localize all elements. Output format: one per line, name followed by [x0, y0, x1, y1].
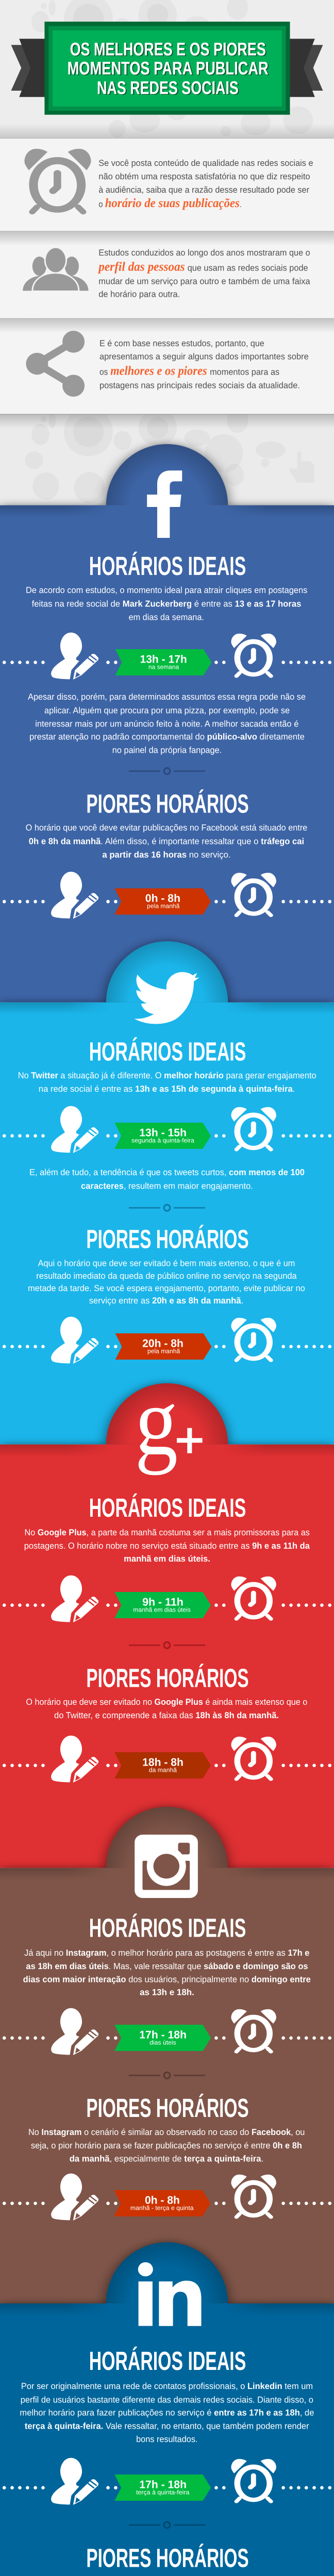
text: twitter ideal: na rede social é entre as 13h e as 15h de segunda à quinta-feira. — [39, 1084, 295, 1094]
text: instagram ideal: as 13h e 18h. — [140, 1988, 194, 1997]
heading: piores horários: PIORES HORÁRIOS — [86, 1225, 249, 1254]
badge: 0h - 8h: manhã - terça e quinta — [130, 2204, 194, 2211]
panel: sharing data — [0, 318, 334, 414]
text: facebook worst: a partir das 16 horas no serviço. — [102, 850, 231, 859]
icon: linkedin in — [138, 2262, 201, 2326]
heading: horários ideais: HORÁRIOS IDEAIS — [89, 2346, 246, 2376]
title text: OS MELHORES E OS PIORES — [70, 39, 266, 59]
text: facebook worst: O horário que você deve evitar publicações no Facebook está situado entre — [26, 823, 307, 833]
text: instagram ideal: as 18h em dias úteis. Mas, vale ressaltar que sábado e domingo são os — [26, 1961, 308, 1971]
badge: 13h - 15h — [114, 1123, 211, 1149]
title banner — [11, 22, 323, 115]
text: instagram ideal: dias com maior interação dos usuários, principalmente no domingo entre — [23, 1974, 311, 1984]
text: google ideal: manhã em dias úteis. — [124, 1554, 210, 1564]
timeline: instagram ideal — [3, 2008, 331, 2055]
intro text 1: horário de suas publicações — [105, 196, 240, 210]
text: google worst — [26, 1697, 307, 1720]
badge: 18h - 8h: 18h - 8h — [142, 1756, 183, 1768]
timeline: linkedin ideal — [3, 2458, 331, 2505]
badge: 20h - 8h: pela manhã — [147, 1347, 180, 1354]
text: google worst: O horário que deve ser evitado no Google Plus é ainda mais extenso que o — [26, 1697, 307, 1707]
text: linkedin ideal: bons resultados. — [136, 2434, 198, 2444]
text: instagram worst: seja, o pior horário para se fazer publicações no serviço é entre 0h e 8h — [31, 2141, 302, 2150]
text: linkedin ideal: perfil de usuários bastante diferente das demais redes sociais. Diante disso, o — [21, 2395, 313, 2404]
icon: group of people — [23, 247, 89, 291]
badge: 0h - 8h: 0h - 8h — [145, 2194, 180, 2206]
text: instagram worst: No Instagram o cenário é similar ao observado no caso do Facebook, ou — [28, 2127, 305, 2137]
text: facebook advice — [28, 692, 306, 755]
text: twitter worst: resultado imediato da queda de público online no serviço na segunda — [36, 1271, 297, 1281]
badge: 13h - 15h: 13h - 15h — [139, 1126, 187, 1139]
badge: 17h - 18h — [114, 2025, 211, 2051]
intro text 2: que usam as redes sociais pode — [188, 263, 308, 273]
intro text 2: de horário para outra. — [98, 290, 180, 299]
panel: facebook — [0, 444, 334, 1003]
green title plate — [44, 22, 290, 115]
badge: 17h - 18h: 17h - 18h — [139, 2478, 187, 2490]
badge: 20h - 8h — [115, 1333, 211, 1360]
icon: twitter bird — [134, 972, 199, 1024]
text: instagram ideal — [23, 1948, 311, 1997]
text: linkedin ideal — [20, 2381, 314, 2444]
icon: instagram camera — [135, 1835, 198, 1898]
intro text 1: à audiência, saiba que a razão desse resultado pode ser — [98, 185, 309, 195]
timeline: google worst — [3, 1736, 331, 1783]
badge: 13h - 15h: segunda à quinta-feira — [131, 1137, 194, 1144]
heading: horários ideais: HORÁRIOS IDEAIS — [89, 1037, 246, 1066]
badge: 17h - 18h — [114, 2475, 211, 2501]
badge: 17h - 18h: terça à quinta-feira — [136, 2488, 190, 2496]
text: facebook advice: aplicar. Alguém que procura por uma pizza, por exemplo, pode se — [44, 705, 290, 715]
text: google ideal: postagens. O horário nobre no serviço está situado entre as 9h e as 11h da — [24, 1541, 310, 1551]
text: twitter ideal: No Twitter a situação já é diferente. O melhor horário para gerar engajamento — [18, 1071, 316, 1080]
icon: facebook f — [147, 470, 182, 538]
text: instagram worst — [28, 2127, 305, 2163]
text: twitter worst — [28, 1258, 305, 1306]
intro text 3: E é com base nesses estudos, portanto, que — [99, 338, 264, 348]
text: twitter worst: metade da tarde. Se você espera engajamento, portanto, evite publicar no — [28, 1283, 305, 1293]
panel: intro schedule — [0, 138, 334, 231]
intro text 3: postagens nas principais redes sociais da atualidade. — [99, 380, 300, 390]
text: twitter tip: E, além de tudo, a tendência é que os tweets curtos, com menos de 100 — [29, 1167, 305, 1177]
intro text 2: mudar de um serviço para outro e também de uma faixa — [98, 277, 310, 286]
intro text 3: os — [99, 367, 108, 377]
intro text 2 — [97, 248, 310, 299]
badge: 18h - 8h — [114, 1752, 211, 1778]
badge: 9h - 11h: manhã em dias úteis — [133, 1606, 191, 1613]
intro text 1: . — [240, 199, 242, 209]
intro text 1: não obtém uma resposta satisfatória no que diz respeito — [98, 172, 310, 181]
heading: horários ideais: HORÁRIOS IDEAIS — [89, 551, 246, 581]
badge: 0h - 8h — [114, 2190, 210, 2216]
badge: 0h - 8h: 0h - 8h — [145, 892, 180, 905]
badge: 17h - 18h: dias úteis — [149, 2039, 176, 2046]
text: facebook ideal: em dias da semana. — [129, 612, 204, 622]
text: facebook ideal — [26, 585, 307, 622]
icon: share — [26, 331, 85, 397]
text: twitter ideal — [18, 1071, 316, 1094]
panel: twitter — [0, 941, 334, 1445]
badge: 0h - 8h — [114, 888, 211, 914]
panel: instagram — [0, 1807, 334, 2303]
text: twitter tip — [29, 1167, 305, 1191]
badge: 0h - 8h: pela manhã — [147, 903, 180, 910]
panel: audience profile — [0, 231, 334, 318]
badge: 17h - 18h: 17h - 18h — [139, 2028, 187, 2041]
title text: MOMENTOS PARA PUBLICAR — [68, 58, 269, 79]
text: facebook worst — [26, 823, 307, 859]
text: facebook ideal: De acordo com estudos, o momento ideal para atrair cliques em postagens — [26, 585, 307, 595]
badge: 9h - 11h — [114, 1592, 211, 1618]
text: facebook worst: 0h e 8h da manhã. Além disso, é importante ressaltar que o tráfego cai — [29, 836, 304, 846]
timeline: facebook worst — [3, 872, 331, 919]
badge: 13h - 17h: 13h - 17h — [140, 653, 187, 665]
text: facebook advice: prestar atenção no padrão comportamental do público-alvo diretamente — [29, 732, 305, 742]
text: google ideal: No Google Plus, a parte da manhã costuma ser a mais promissoras para as — [25, 1528, 310, 1537]
text: twitter worst: serviço entre as 20h e as 8h da manhã. — [89, 1296, 243, 1306]
badge: 20h - 8h: 20h - 8h — [142, 1337, 183, 1349]
timeline: facebook ideal — [3, 633, 331, 680]
text: twitter worst: Aqui o horário que deve ser evitado é bem mais extenso, o que é um — [38, 1258, 295, 1268]
text: facebook advice: Apesar disso, porém, para determinados assuntos essa regra pode não se — [28, 692, 306, 702]
timeline: google ideal — [3, 1575, 331, 1622]
intro text 1: Se você posta conteúdo de qualidade nas redes sociais e — [98, 158, 313, 168]
heading: piores horários: PIORES HORÁRIOS — [86, 789, 249, 818]
intro text 3 — [99, 338, 309, 390]
heading: horários ideais: HORÁRIOS IDEAIS — [89, 1493, 246, 1522]
text: facebook advice: no painel da própria fanpage. — [112, 745, 222, 755]
intro text 3: momentos para as — [210, 367, 279, 377]
title text — [68, 39, 269, 98]
intro text 1: o — [98, 199, 103, 209]
panel: linkedin — [0, 2242, 334, 2576]
title text: NAS REDES SOCIAIS — [97, 77, 239, 98]
badge: 9h - 11h: 9h - 11h — [142, 1596, 183, 1608]
intro text 3: melhores e os piores — [110, 364, 207, 378]
text: twitter tip: caracteres, resultem em maior engajamento. — [81, 1181, 253, 1191]
ribbon: back folds — [11, 39, 323, 97]
timeline: instagram worst — [3, 2174, 331, 2221]
text: facebook ideal: feitas na rede social de Mark Zuckerberg é entre as 13 e as 17 horas — [32, 599, 301, 608]
text: facebook advice: interessar mais por um anúncio feito à noite. A melhor sacada então é — [35, 719, 298, 728]
text: linkedin ideal: Por ser originalmente uma rede de contatos profissionais, o Linkedin tem um — [21, 2381, 313, 2391]
icon: google plus: g — [135, 1367, 178, 1476]
timeline: twitter ideal — [3, 1106, 331, 1153]
middle textured background — [0, 408, 334, 551]
heading: piores horários: PIORES HORÁRIOS — [86, 1663, 249, 1692]
text: linkedin ideal: melhor horário para fazer publicações no serviço é entre as 17h e as 18h, de — [20, 2408, 314, 2418]
icon: alarm clock — [25, 149, 91, 213]
text: linkedin ideal: terça à quinta-feira. Vale ressaltar, no entanto, que também podem render — [25, 2421, 309, 2431]
text: google ideal — [24, 1528, 310, 1564]
badge: 18h - 8h: da manhã — [149, 1766, 177, 1773]
intro text 3: apresentamos a seguir alguns dados importantes sobre — [99, 352, 309, 362]
text: instagram ideal: Já aqui no Instagram, o melhor horário para as postagens é entre as 17h e — [24, 1948, 310, 1958]
intro text 2: Estudos conduzidos ao longo dos anos mostraram que o — [98, 248, 310, 258]
timeline: twitter worst — [3, 1317, 331, 1364]
heading: horários ideais: HORÁRIOS IDEAIS — [89, 1913, 246, 1942]
heading: piores horários: PIORES HORÁRIOS — [86, 2093, 249, 2123]
text: google worst: do Twitter, e compreende a faixa das 18h às 8h da manhã. — [54, 1710, 279, 1720]
badge: 13h - 17h — [115, 649, 211, 675]
intro text 2: perfil das pessoas — [97, 260, 185, 274]
text: instagram worst: da manhã, especialmente de terça a quinta-feira. — [70, 2154, 263, 2163]
heading: piores horários: PIORES HORÁRIOS — [86, 2543, 249, 2572]
top textured background — [0, 0, 334, 138]
intro text 1 — [98, 158, 313, 210]
badge: 13h - 17h: na semana — [148, 663, 179, 670]
panel: google plus — [0, 1367, 334, 1868]
